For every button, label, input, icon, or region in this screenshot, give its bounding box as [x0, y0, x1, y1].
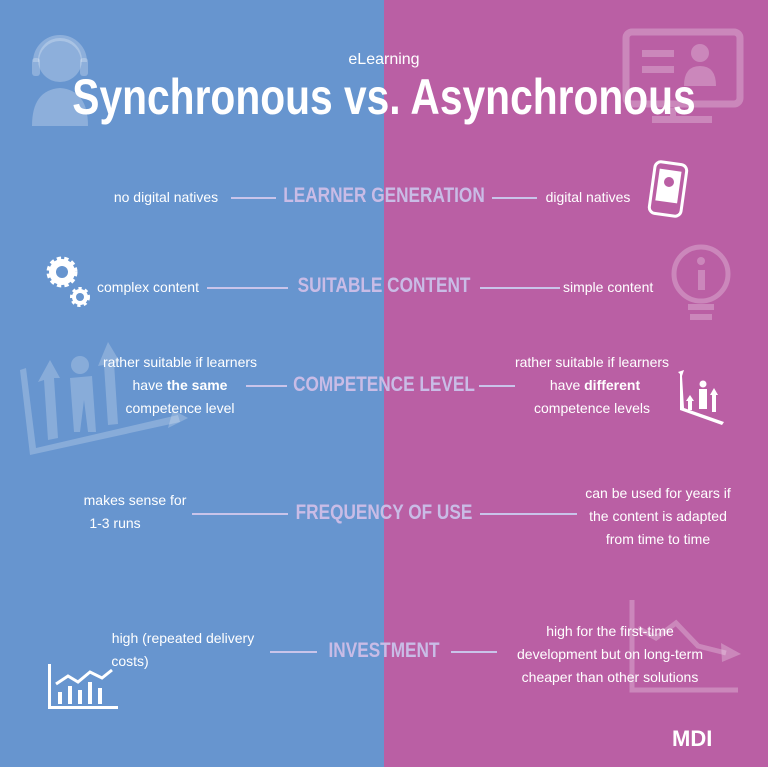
row: frequency of use: the content is adapted: [589, 508, 727, 524]
row: investment: costs): [111, 653, 149, 669]
row: frequency of use: FREQUENCY OF USE: [296, 501, 472, 524]
row: frequency of use: from time to time: [606, 531, 710, 547]
row: competence level: COMPETENCE LEVEL: [293, 373, 475, 396]
row: investment: INVESTMENT: [329, 639, 439, 662]
subtitle: eLearning: [348, 51, 420, 68]
row: frequency of use: 1-3 runs: [89, 515, 141, 531]
title: Synchronous vs. Asynchronous: [72, 69, 696, 125]
icon: computer screen: [622, 28, 744, 123]
row: suitable content: SUITABLE CONTENT: [298, 274, 470, 297]
icon: bar chart: [48, 664, 118, 709]
row: learner generation: LEARNER GENERATION: [283, 184, 485, 207]
row: suitable content: [97, 274, 654, 297]
row: competence level: rather suitable if learners: [515, 354, 669, 370]
row: learner generation: no digital natives: [114, 189, 218, 205]
row: competence level: [103, 354, 669, 416]
row: investment: high (repeated delivery: [112, 630, 254, 646]
row: competence level: have the same: [133, 377, 227, 393]
icon: growth people chart (left): [20, 342, 188, 455]
row: frequency of use: makes sense for: [84, 492, 186, 508]
logo: MDI: MDI: [672, 726, 712, 751]
row: investment: high for the first-time: [546, 623, 674, 639]
icon: phone: [648, 160, 688, 218]
icon: lightbulb info: [672, 244, 730, 320]
row: learner generation: [114, 184, 630, 207]
icon: declining chart: [630, 600, 741, 692]
icon: headset person: [32, 35, 88, 126]
row: investment: development but on long-term: [517, 646, 703, 662]
row: suitable content: simple content: [563, 279, 653, 295]
icon: growth people chart (right): [678, 370, 724, 425]
row: investment: cheaper than other solutions: [522, 669, 698, 685]
row: investment: [111, 623, 703, 685]
row: learner generation: digital natives: [546, 189, 630, 205]
row: competence level: have different: [550, 377, 640, 393]
icon: gears: [46, 256, 90, 307]
row: frequency of use: [84, 485, 731, 547]
row: suitable content: complex content: [97, 279, 199, 295]
row: competence level: rather suitable if learners: [103, 354, 257, 370]
row: competence level: competence levels: [534, 400, 650, 416]
row: frequency of use: can be used for years if: [585, 485, 731, 501]
row: competence level: competence level: [126, 400, 234, 416]
